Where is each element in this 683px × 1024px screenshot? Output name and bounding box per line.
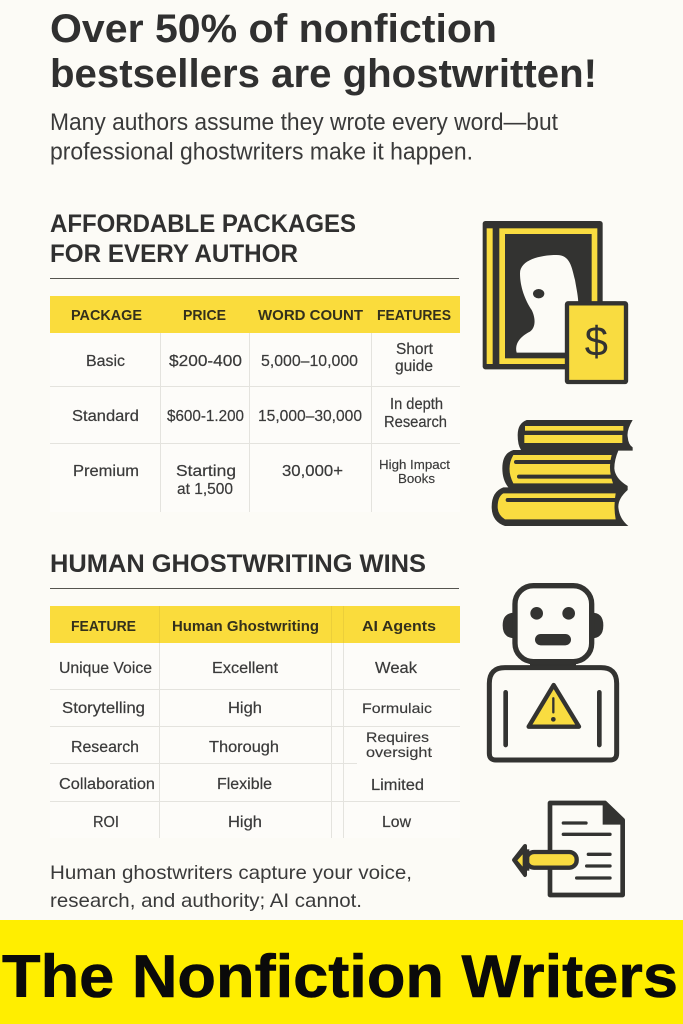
subtitle text: Many authors assume they wrote every word—but: [50, 109, 558, 136]
table header: packages: PRICE: [183, 307, 226, 324]
row: storytelling: Storytelling: [62, 700, 145, 717]
row: standard: Standard: [72, 408, 139, 425]
table header: comparison: FEATURE: [71, 618, 136, 635]
table header: packages: PACKAGE: [71, 307, 142, 324]
row: unique voice: Unique Voice: [59, 660, 152, 677]
table header: comparison: Human Ghostwriting: [172, 618, 319, 635]
row: premium: 30,000+: [282, 463, 343, 480]
row: basic: 5,000–10,000: [261, 353, 358, 370]
table header: packages: FEATURES: [377, 307, 451, 324]
row: ROI: Low: [382, 814, 412, 831]
icon: ghostwriter portrait with price card: [483, 221, 626, 382]
row: research: oversight: [366, 744, 432, 760]
footer banner: brand name: The Nonfiction Writers: [2, 943, 678, 1010]
icon: robot with warning triangle: [489, 586, 617, 760]
row: basic: $200-400: [169, 353, 242, 370]
row: standard: $600-1.200: [167, 408, 244, 425]
heading: human ghostwriting wins: HUMAN GHOSTWRITING WINS: [50, 550, 426, 578]
row: research: [71, 729, 432, 760]
row: basic: guide: [395, 358, 433, 375]
row: storytelling: [62, 700, 432, 717]
row: research: Research: [71, 739, 139, 756]
row: premium: [73, 458, 451, 498]
table header: comparison: AI Agents: [362, 618, 436, 635]
row: unique voice: Excellent: [212, 660, 279, 677]
row: premium: Premium: [73, 463, 139, 480]
icon: ghostwriter portrait with price card: $: [585, 318, 608, 365]
table header: comparison: [50, 606, 460, 643]
icon: document with pencil: [514, 803, 623, 895]
row: research: Thorough: [209, 739, 279, 756]
row: storytelling: Formulaic: [362, 700, 432, 716]
row: standard: Research: [384, 414, 447, 431]
row: storytelling: High: [228, 700, 262, 717]
row: standard: In depth: [390, 396, 443, 413]
row: ROI: ROI: [93, 814, 119, 831]
row: premium: Starting: [176, 463, 236, 480]
heading: affordable packages: AFFORDABLE PACKAGES: [50, 210, 356, 238]
row: premium: at 1,500: [177, 481, 233, 498]
row: basic: Basic: [86, 353, 125, 370]
row: unique voice: Weak: [375, 660, 417, 677]
row: standard: [72, 396, 447, 431]
row: research: Requires: [366, 729, 429, 745]
row: premium: High Impact: [379, 458, 451, 472]
row: basic: Short: [396, 341, 434, 358]
table header: packages: [50, 296, 460, 333]
row: collaboration: [59, 776, 424, 794]
row: collaboration: Limited: [371, 777, 424, 794]
row: collaboration: Flexible: [217, 776, 272, 793]
closing text: research, and authority; AI cannot.: [50, 890, 362, 912]
row: standard: 15,000–30,000: [258, 408, 362, 425]
closing text: Human ghostwriters capture your voice,: [50, 862, 412, 884]
row: ROI: [93, 814, 412, 831]
icon: stack of books: [492, 420, 633, 526]
row: basic: [86, 341, 434, 375]
footer banner: brand name: [0, 920, 683, 1024]
row: unique voice: [59, 660, 417, 677]
row: collaboration: Collaboration: [59, 776, 155, 793]
title: [50, 7, 597, 96]
heading: affordable packages: FOR EVERY AUTHOR: [50, 240, 298, 268]
subtitle text: professional ghostwriters make it happen.: [50, 138, 473, 166]
closing text: [50, 862, 412, 912]
row: premium: Books: [398, 472, 435, 486]
table: human vs AI comparison: [50, 606, 460, 838]
table: packages: [50, 296, 460, 512]
heading: affordable packages: [50, 210, 459, 278]
row: ROI: High: [228, 814, 262, 831]
table header: packages: WORD COUNT: [258, 307, 363, 324]
title: bestsellers are ghostwritten!: [50, 52, 597, 96]
subtitle text: [50, 109, 558, 166]
title: Over 50% of nonfiction: [50, 7, 497, 51]
